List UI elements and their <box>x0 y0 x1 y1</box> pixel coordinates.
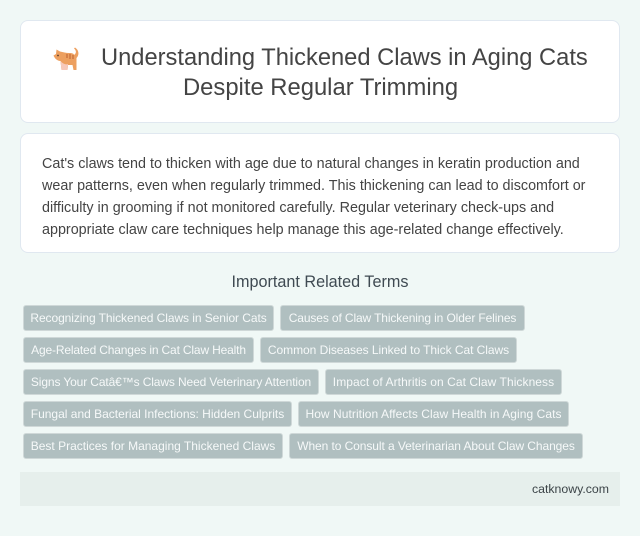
summary paragraph: wear patterns, even when regularly trimmed. This thickening can lead to discomfort or <box>42 178 585 194</box>
tag <box>260 337 517 363</box>
tag <box>280 305 525 331</box>
tag: Signs Your Catâ€™s Claws Need Veterinary Attention <box>31 375 311 389</box>
footer site name: catknowy.com <box>532 482 609 496</box>
tag list <box>23 305 583 459</box>
tag: How Nutrition Affects Claw Health in Aging Cats <box>305 407 562 421</box>
tag: Common Diseases Linked to Thick Cat Claws <box>268 343 509 357</box>
tag <box>325 369 562 395</box>
summary paragraph: appropriate claw care techniques help manage this age-related change effectively. <box>42 222 564 238</box>
summary paragraph: difficulty in grooming if not monitored carefully. Regular veterinary check-ups and <box>42 200 554 216</box>
panel: title card <box>20 20 620 123</box>
section heading: related terms: Important Related Terms <box>232 273 408 291</box>
tag <box>23 337 254 363</box>
tag <box>23 369 319 395</box>
panel: summary text <box>20 133 620 253</box>
tag: Recognizing Thickened Claws in Senior Cats <box>30 311 267 325</box>
tag <box>298 401 569 427</box>
tag: Causes of Claw Thickening in Older Felines <box>289 311 516 325</box>
footer bar <box>20 472 620 506</box>
tag <box>23 433 283 459</box>
tag: Best Practices for Managing Thickened Claws <box>31 439 275 453</box>
tag <box>23 401 292 427</box>
heading line 2: Despite Regular Trimming <box>183 74 458 101</box>
tag <box>23 305 274 331</box>
icon: cat <box>54 48 78 70</box>
heading line 1: Understanding Thickened Claws in Aging Cats <box>101 45 588 71</box>
summary paragraph: Cat's claws tend to thicken with age due to natural changes in keratin production and <box>42 156 580 172</box>
tag: Fungal and Bacterial Infections: Hidden Culprits <box>31 407 284 421</box>
summary paragraph <box>42 156 586 238</box>
tag: When to Consult a Veterinarian About Claw Changes <box>297 439 575 453</box>
tag: Age-Related Changes in Cat Claw Health <box>31 343 246 357</box>
tag: Impact of Arthritis on Cat Claw Thickness <box>333 375 554 389</box>
tag <box>289 433 583 459</box>
